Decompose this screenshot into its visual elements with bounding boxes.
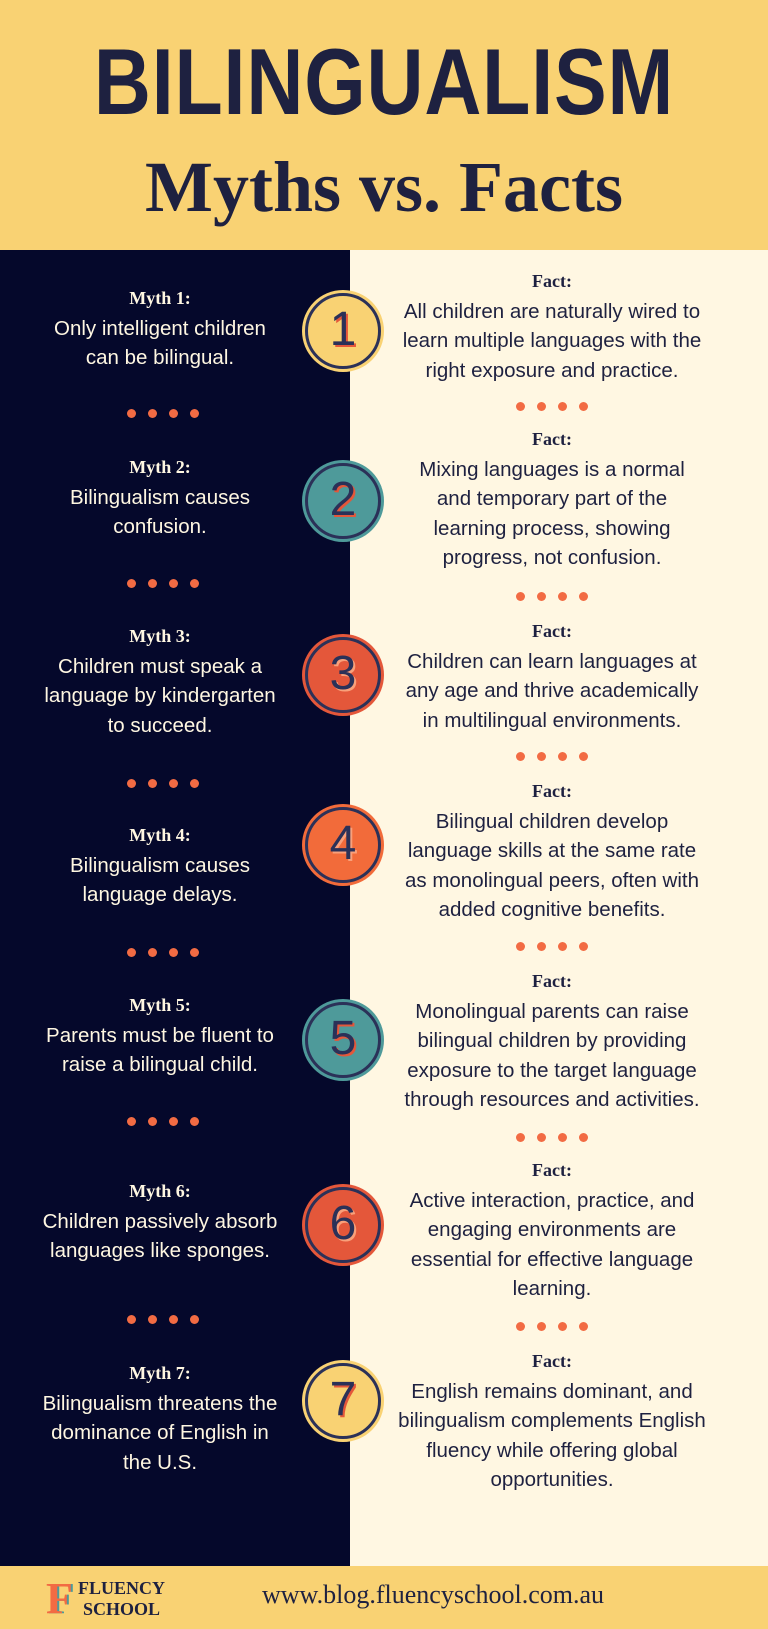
myth 7 [43,1363,277,1474]
fact 7: bilingualism complements English [398,1409,706,1432]
icon: number 4: 4 [330,817,356,870]
myth 4 [70,825,250,906]
dots [127,579,199,588]
fact 3: any age and thrive academically [406,679,698,702]
icon: number 3: 3 [330,647,356,700]
myth 7: the U.S. [123,1450,197,1474]
icon: number 5 [305,1002,381,1078]
myth 7: Bilingualism threatens the [43,1392,277,1414]
fact 3: Fact: [532,621,572,641]
myth 6: Children passively absorb [43,1210,277,1232]
icon: number 7 [305,1363,381,1439]
dots [516,942,588,951]
myth 7: dominance of English in [51,1421,269,1444]
fact 4: language skills at the same rate [408,839,696,862]
fact 7: English remains dominant, and [411,1380,693,1402]
myth 3: to succeed. [108,714,212,736]
fact 5: through resources and activities. [404,1088,700,1111]
dots [127,409,199,418]
icon: number 4 [305,807,381,883]
fact 2: and temporary part of the [437,487,667,510]
myth 4: Bilingualism causes [70,854,250,876]
myth 5: raise a bilingual child. [62,1053,258,1076]
panel: myths [0,250,350,1566]
myth 3: Children must speak a [58,654,262,678]
myth 5: Parents must be fluent to [46,1024,274,1046]
fact 5: bilingual children by providing [418,1029,686,1052]
website: www.blog.fluencyschool.com.au [262,1580,604,1609]
icon: number 6 [305,1187,381,1263]
icon: number 2: 2 [330,473,356,526]
footer [0,1566,768,1629]
fact 4 [405,781,699,921]
myth 6: Myth 6: [129,1181,191,1201]
subtitle: Myths vs. Facts [145,147,623,227]
fact 1: Fact: [532,271,572,291]
fact 3 [406,621,698,732]
dots [127,1315,199,1324]
fact 6: learning. [513,1277,591,1300]
myth 3 [44,626,276,736]
icon: number 7: 7 [330,1373,356,1426]
logo text: FLUENCY [78,1578,165,1598]
fact 2: progress, not confusion. [443,546,661,569]
icon: number 1 [305,293,381,369]
icon: number 5: 5 [330,1012,356,1065]
icon: F: F [46,1574,73,1623]
dots [516,402,588,411]
fact 2: Mixing languages is a normal [419,458,685,480]
myth 1 [54,288,266,369]
dots [516,752,588,761]
fact 6 [410,1160,694,1300]
myth 2: Myth 2: [129,457,191,477]
fact 1: right exposure and practice. [426,358,678,382]
myth 4: language delays. [82,883,238,906]
icon: number 3 [305,637,381,713]
myth 3: Myth 3: [129,626,191,646]
myth 1: Myth 1: [129,288,191,308]
dots [127,948,199,957]
fact 4: Bilingual children develop [436,810,668,832]
myth 2 [70,457,250,538]
logo text [78,1578,165,1619]
logo text: SCHOOL [83,1599,160,1619]
fact 3: Children can learn languages at [407,650,697,672]
myth 1: Only intelligent children [54,316,266,340]
header [0,0,768,250]
fact 6: Active interaction, practice, and [410,1188,694,1212]
icon: number 1: 1 [330,303,356,356]
logo [46,1574,165,1623]
fact 5: Monolingual parents can raise [415,1000,689,1022]
fact 7: Fact: [532,1351,572,1371]
dots [127,779,199,788]
myth 7: Myth 7: [129,1363,191,1383]
icon: number 6: 6 [330,1197,356,1250]
myth 4: Myth 4: [129,825,191,845]
fact 2: learning process, showing [433,516,671,540]
fact 2 [419,429,685,569]
fact 5: exposure to the target language [407,1058,697,1082]
myth 5: Myth 5: [129,995,191,1015]
myth 1: can be bilingual. [86,346,234,369]
dots [516,592,588,601]
fact 5: Fact: [532,971,572,991]
fact 5 [404,971,700,1111]
icon: number 2 [305,463,381,539]
fact 4: Fact: [532,781,572,801]
fact 6: essential for effective language [411,1248,693,1270]
fact 6: Fact: [532,1160,572,1180]
fact 1: learn multiple languages with the [403,329,701,352]
fact 7: opportunities. [490,1468,614,1491]
fact 4: as monolingual peers, often with [405,868,699,892]
fact 4: added cognitive benefits. [439,898,665,921]
dots [516,1133,588,1142]
fact 1: All children are naturally wired to [404,300,700,322]
myth 6 [43,1181,277,1262]
fact 7: fluency while offering global [426,1438,678,1462]
title: BILINGUALISM [94,29,674,134]
dots [127,1117,199,1126]
myth 2: Bilingualism causes [70,486,250,508]
fact 2: Fact: [532,429,572,449]
fact 1 [403,271,701,382]
fact 7 [398,1351,706,1491]
myth 3: language by kindergarten [44,684,276,707]
fact 3: in multilingual environments. [423,708,681,732]
fact 6: engaging environments are [428,1218,676,1241]
myth 2: confusion. [113,515,207,538]
myth 5 [46,995,274,1076]
myth 6: languages like sponges. [50,1239,270,1262]
dots [516,1322,588,1331]
